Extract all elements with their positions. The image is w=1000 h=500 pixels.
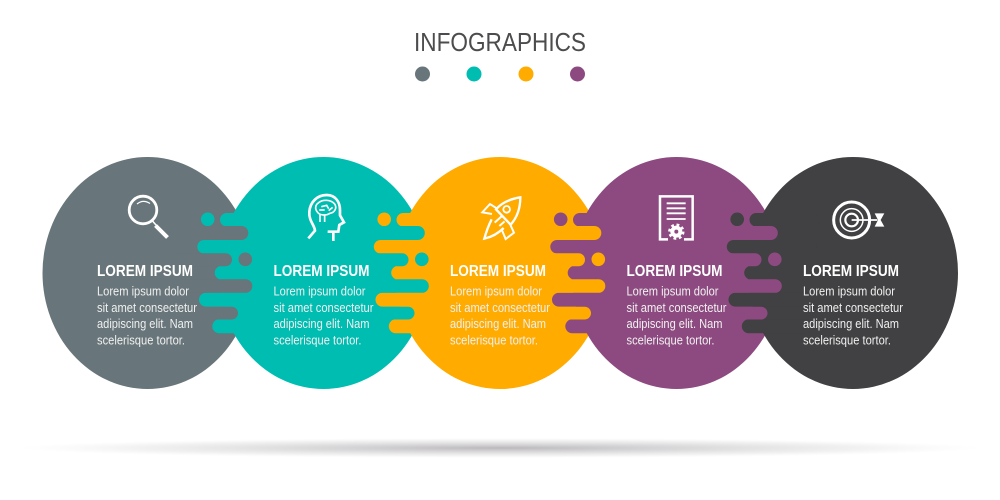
text block: step 1: sit amet consectetur (97, 301, 197, 315)
text block: step 2: sit amet consectetur (274, 301, 374, 315)
text block: step 3: scelerisque tortor. (450, 333, 538, 347)
icon: document with gear (660, 196, 693, 239)
panel: orange circle (395, 157, 605, 389)
title: INFOGRAPHICS (414, 29, 586, 57)
text block: step 5: scelerisque tortor. (803, 333, 891, 347)
legend dots (415, 66, 585, 82)
connector: grey to teal fingers (170, 212, 290, 333)
connector: orange to purple fingers (523, 212, 643, 333)
text block: step 2: scelerisque tortor. (274, 333, 362, 347)
text block: step 4: LOREM IPSUM (626, 263, 722, 280)
text block: step 5: LOREM IPSUM (803, 263, 899, 280)
icon: target with arrow (834, 202, 884, 238)
panel: dark circle (748, 157, 958, 389)
icon: magnifying glass (129, 196, 168, 238)
text block: step 4 (626, 263, 726, 347)
text block: step 4: sit amet consectetur (626, 301, 726, 315)
text block: step 5: adipiscing elit. Nam (803, 317, 899, 331)
panel: grey circle (42, 157, 252, 389)
panel: teal circle (218, 157, 428, 389)
connector: teal to orange fingers (346, 212, 466, 333)
text block: step 5: sit amet consectetur (803, 301, 903, 315)
text block: step 2: LOREM IPSUM (274, 263, 370, 280)
text block: step 5 (803, 263, 903, 347)
icon: head with brain (308, 195, 344, 241)
text block: step 1 (97, 263, 197, 347)
text block: step 1: Lorem ipsum dolor (97, 285, 189, 299)
panel: purple circle (572, 157, 782, 389)
text block: step 3: Lorem ipsum dolor (450, 285, 542, 299)
text block: step 2: adipiscing elit. Nam (274, 317, 370, 331)
text block: step 4: scelerisque tortor. (626, 333, 714, 347)
text block: step 1: adipiscing elit. Nam (97, 317, 193, 331)
text block: step 1: scelerisque tortor. (97, 333, 185, 347)
icon: rocket (482, 197, 520, 239)
ground shadow (18, 438, 982, 458)
text block: step 5: Lorem ipsum dolor (803, 285, 895, 299)
text block: step 1: LOREM IPSUM (97, 263, 193, 280)
text block: step 3 (450, 263, 550, 347)
text block: step 3: LOREM IPSUM (450, 263, 546, 280)
text block: step 4: Lorem ipsum dolor (626, 285, 718, 299)
text block: step 2: Lorem ipsum dolor (274, 285, 366, 299)
text block: step 3: sit amet consectetur (450, 301, 550, 315)
text block: step 2 (274, 263, 374, 347)
text block: step 3: adipiscing elit. Nam (450, 317, 546, 331)
connector: purple to dark fingers (700, 212, 820, 333)
text block: step 4: adipiscing elit. Nam (626, 317, 722, 331)
